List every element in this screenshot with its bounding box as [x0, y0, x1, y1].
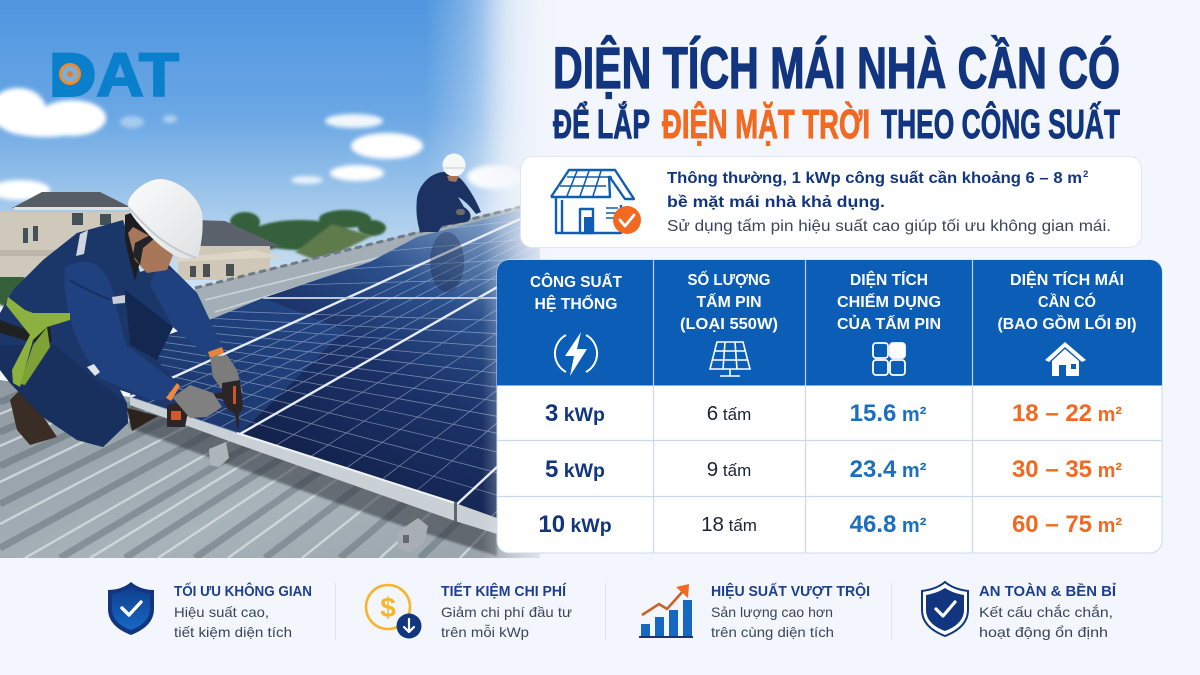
benefit: safety and durability: AN TOÀN & BỀN BỈ [979, 583, 1116, 600]
benefit: space optimisation: tiết kiệm diện tích [174, 624, 292, 640]
header: panel footprint: DIỆN TÍCH [850, 271, 928, 289]
header: system capacity: HỆ THỐNG [534, 295, 618, 313]
header: required roof area: (BAO GỒM LỐI ĐI) [998, 315, 1136, 333]
benefit: cost saving: Giảm chi phí đầu tư [441, 604, 572, 620]
corrugated lower roof [0, 380, 540, 558]
row: 3 kWp: 18 – 22 m² [1012, 400, 1122, 427]
icon: coin with down arrow [366, 585, 422, 638]
benefit: safety and durability: Kết cấu chắc chắn, [979, 604, 1113, 620]
background house left [0, 192, 130, 277]
row: 10 kWp [538, 511, 1122, 538]
sky [0, 0, 530, 290]
row: 5 kWp: 23.4 m² [850, 456, 927, 483]
row: 3 kWp: 3 kWp [545, 400, 605, 427]
header: system capacity [530, 273, 623, 376]
clouds [0, 88, 523, 200]
note text [667, 169, 1111, 235]
icon: coin with down arrow: $ [380, 592, 396, 623]
logo: DAT: DAT [49, 41, 179, 109]
row: 10 kWp: 10 kWp [538, 511, 612, 538]
header: panel footprint [837, 271, 941, 375]
header: required roof area: DIỆN TÍCH MÁI [1010, 271, 1124, 289]
benefit: safety and durability: hoạt động ổn định [979, 624, 1108, 640]
upper roof strip [194, 206, 520, 320]
header: number of panels: TẤM PIN [696, 294, 762, 311]
benefit: superior performance [639, 582, 870, 640]
note text: Sử dụng tấm pin hiệu suất cao giúp tối ưu không gian mái. [667, 218, 1111, 235]
solar panel field [130, 210, 540, 518]
photo: workers installing solar panels on a roof [0, 0, 1000, 560]
row: 10 kWp: 46.8 m² [850, 511, 927, 538]
icon: blue shield with check [108, 582, 154, 635]
icon: four squares [873, 343, 905, 375]
background house right [175, 220, 282, 280]
row: 5 kWp: 30 – 35 m² [1012, 456, 1122, 483]
note text: 2 [1083, 169, 1088, 180]
icon: navy shield with check [922, 582, 968, 636]
background hill [295, 224, 372, 262]
benefit: superior performance: trên cùng diện tích [711, 624, 834, 640]
near sleeve [64, 262, 177, 400]
safety harness [6, 297, 70, 387]
title [553, 36, 1120, 147]
icon: lightning bolt [555, 332, 597, 376]
row: 5 kWp: 9 tấm [707, 458, 751, 481]
icon: orange check badge [613, 206, 641, 234]
footer band [0, 558, 1200, 675]
neck and hair [125, 210, 150, 280]
header: number of panels [680, 271, 778, 376]
hard hat [128, 179, 203, 258]
near glove [173, 385, 222, 418]
benefit: safety and durability [922, 582, 1116, 640]
title: ĐỂ LẮP [553, 100, 650, 147]
foreground worker [0, 179, 243, 447]
header: panel footprint: CỦA TẤM PIN [837, 315, 941, 333]
icon: solar panel [710, 342, 750, 376]
reflective strips [76, 230, 88, 256]
row: 3 kWp [545, 400, 1122, 427]
note text: bề mặt mái nhà khả dụng. [667, 194, 885, 211]
row: 3 kWp: 6 tấm [707, 402, 751, 425]
table: roof area by system capacity [497, 260, 1162, 553]
benefit: space optimisation: Hiệu suất cao, [174, 604, 269, 620]
torso shade [125, 290, 173, 360]
header: required roof area [998, 271, 1136, 376]
panel: rule of thumb note [520, 156, 1142, 248]
icon: rising bar chart with arrow [639, 584, 693, 638]
sky fade [432, 0, 557, 260]
row: 10 kWp: 60 – 75 m² [1012, 511, 1122, 538]
benefit: superior performance: HIỆU SUẤT VƯỢT TRỘI [711, 582, 870, 600]
module frames [130, 218, 520, 504]
trouser shading [0, 345, 128, 447]
far glove [210, 355, 243, 393]
note text: Thông thường, 1 kWp công suất cần khoảng 6 – 8 m [667, 170, 1082, 187]
row: 3 kWp: 15.6 m² [850, 400, 927, 427]
benefit: space optimisation: TỐI ƯU KHÔNG GIAN [174, 582, 312, 600]
orange cuffs [208, 347, 224, 358]
silhouette of jacket and trousers [0, 220, 222, 447]
title: ĐIỆN MẶT TRỜI [662, 101, 870, 147]
benefit: space optimisation [108, 582, 312, 640]
table header [497, 260, 1162, 553]
panel aluminium frame and mounting brackets [130, 397, 497, 553]
benefit: cost saving: TIẾT KIỆM CHI PHÍ [441, 582, 567, 600]
right fade [484, 0, 549, 558]
cell grid [131, 220, 540, 516]
face [128, 227, 173, 273]
tool belt [0, 320, 52, 342]
row: 5 kWp [545, 456, 1122, 483]
benefit: cost saving: trên mỗi kWp [441, 624, 529, 640]
far sleeve [150, 262, 222, 357]
row: 10 kWp: 18 tấm [701, 513, 757, 536]
power drill [167, 380, 243, 428]
header: panel footprint: CHIẾM DỤNG [837, 294, 941, 311]
header: number of panels: (LOẠI 550W) [680, 316, 778, 333]
header: number of panels: SỐ LƯỢNG [688, 271, 770, 289]
icon: house [1045, 342, 1086, 376]
icon: house with solar roof and check [551, 170, 634, 233]
distant worker [416, 154, 481, 292]
row: 5 kWp: 5 kWp [545, 456, 605, 483]
background trees [0, 210, 386, 307]
boots [10, 387, 57, 445]
benefit: superior performance: Sản lượng cao hơn [711, 604, 833, 620]
benefit: cost saving [366, 582, 572, 640]
header: required roof area: CẦN CÓ [1038, 293, 1096, 311]
header: system capacity: CÔNG SUẤT [530, 273, 623, 291]
